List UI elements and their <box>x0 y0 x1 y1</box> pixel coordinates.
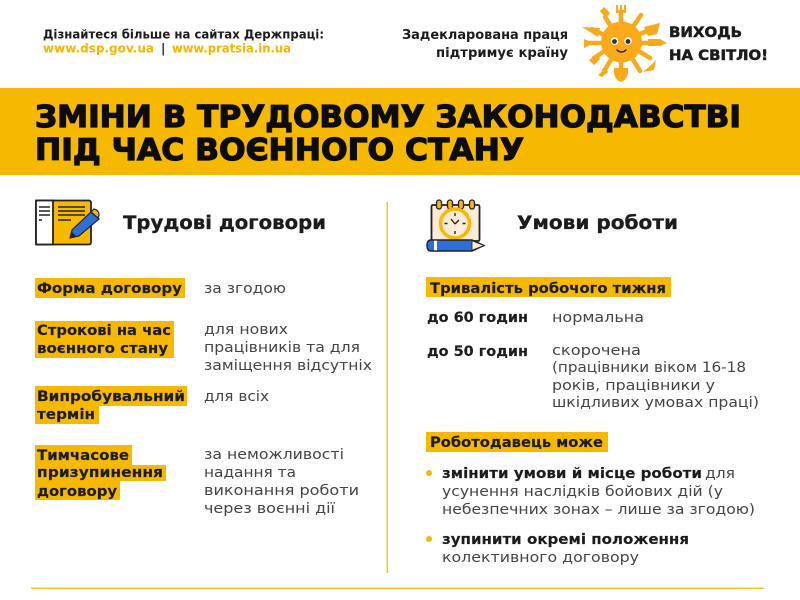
row: temporary suspension: через воєнні дії <box>204 501 336 517</box>
top left: website info <box>43 28 324 56</box>
bullet: suspend provisions: колективного договору <box>442 550 639 566</box>
row: fixed-term contracts <box>35 321 372 374</box>
bullet: change conditions: змінити умови й місце роботи <box>442 466 702 482</box>
row: temporary suspension: за неможливості <box>204 447 344 463</box>
row: contract form: за згодою <box>204 281 286 297</box>
bullet: change conditions: небезпечних зонах – лише за згодою) <box>442 502 755 518</box>
top left: website info: | <box>161 42 165 56</box>
panel: employment contracts <box>35 278 372 517</box>
panel: working conditions <box>426 277 759 566</box>
heading: working conditions: Умови роботи <box>517 212 678 234</box>
row: up to 50 hours: до 50 годин <box>427 344 528 360</box>
title banner: ПІД ЧАС ВОЄННОГО СТАНУ <box>35 133 524 168</box>
row: contract form: Форма договору <box>37 281 183 297</box>
title banner: ЗМІНИ В ТРУДОВОМУ ЗАКОНОДАВСТВІ <box>35 100 741 135</box>
row: probation period <box>35 386 269 424</box>
row: up to 60 hours <box>427 310 644 326</box>
row: up to 50 hours: скорочена <box>552 343 641 359</box>
bullet: suspend provisions: зупинити окремі положення <box>442 532 689 548</box>
working week heading: Тривалість робочого тижня <box>430 281 666 297</box>
campaign name <box>669 25 768 64</box>
row: fixed-term contracts: Строкові на час <box>37 323 171 339</box>
row: temporary suspension: виконання роботи <box>204 483 359 499</box>
row: fixed-term contracts: воєнного стану <box>37 341 169 357</box>
top left: website info: www.dsp.gov.ua <box>43 42 154 56</box>
top left: website info: www.pratsia.in.ua <box>172 42 291 56</box>
row: temporary suspension <box>35 445 359 517</box>
row: up to 50 hours: шкідливих умовах праці) <box>552 395 759 411</box>
row: up to 50 hours: років, працівники у <box>552 378 715 394</box>
campaign name: НА СВІТЛО! <box>669 48 768 64</box>
campaign slogan: підтримує країну <box>436 46 569 61</box>
row: up to 60 hours: нормальна <box>552 310 644 326</box>
row: fixed-term contracts: працівників та для <box>204 340 360 356</box>
row: fixed-term contracts: для нових <box>204 322 288 338</box>
top left: website info: Дізнайтеся більше на сайтах Держпраці: <box>43 28 324 42</box>
bullet: change conditions: усунення наслідків бойових дій (у <box>442 484 723 500</box>
campaign name: ВИХОДЬ <box>669 25 742 41</box>
row: temporary suspension: договору <box>37 484 118 500</box>
bullet: change conditions: для <box>705 466 735 482</box>
bullet: change conditions <box>426 466 755 518</box>
employer heading: Роботодавець може <box>430 435 603 451</box>
row: probation period: Випробувальний <box>37 389 185 405</box>
campaign slogan <box>402 28 569 61</box>
row: probation period: термін <box>37 407 95 423</box>
campaign slogan: Задекларована праця <box>402 28 568 43</box>
row: fixed-term contracts: заміщення відсутніх <box>204 358 372 374</box>
heading: employment contracts: Трудові договори <box>123 212 326 234</box>
title banner <box>0 88 800 175</box>
row: probation period: для всіх <box>204 389 269 405</box>
row: contract form <box>35 278 286 298</box>
icon: calendar clock and pencil <box>427 200 484 251</box>
row: temporary suspension: Тимчасове <box>37 448 129 464</box>
row: temporary suspension: надання та <box>204 465 296 481</box>
row: up to 60 hours: до 60 годин <box>427 310 528 326</box>
row: up to 50 hours: (працівники віком 16-18 <box>552 360 746 376</box>
bullet: suspend provisions <box>426 532 689 566</box>
row: up to 50 hours <box>427 343 759 411</box>
icon: sun logo with tools <box>582 5 667 82</box>
icon: contract document and pen <box>36 200 99 244</box>
row: temporary suspension: призупинення <box>37 465 163 481</box>
